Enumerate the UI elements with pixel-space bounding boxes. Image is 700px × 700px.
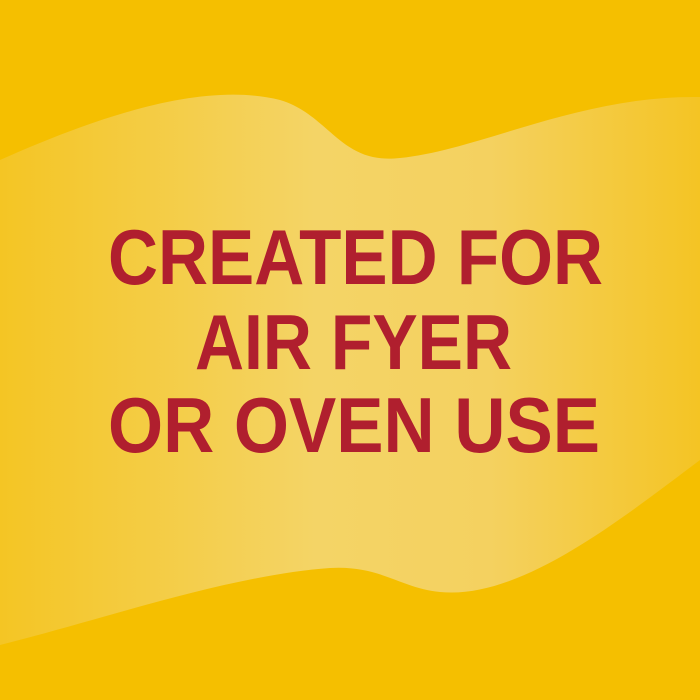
wave band <box>0 95 700 645</box>
line 2: AIR FYER <box>195 298 512 386</box>
headline <box>108 213 603 469</box>
line 1: CREATED FOR <box>108 213 603 301</box>
line 3: OR OVEN USE <box>108 381 600 469</box>
